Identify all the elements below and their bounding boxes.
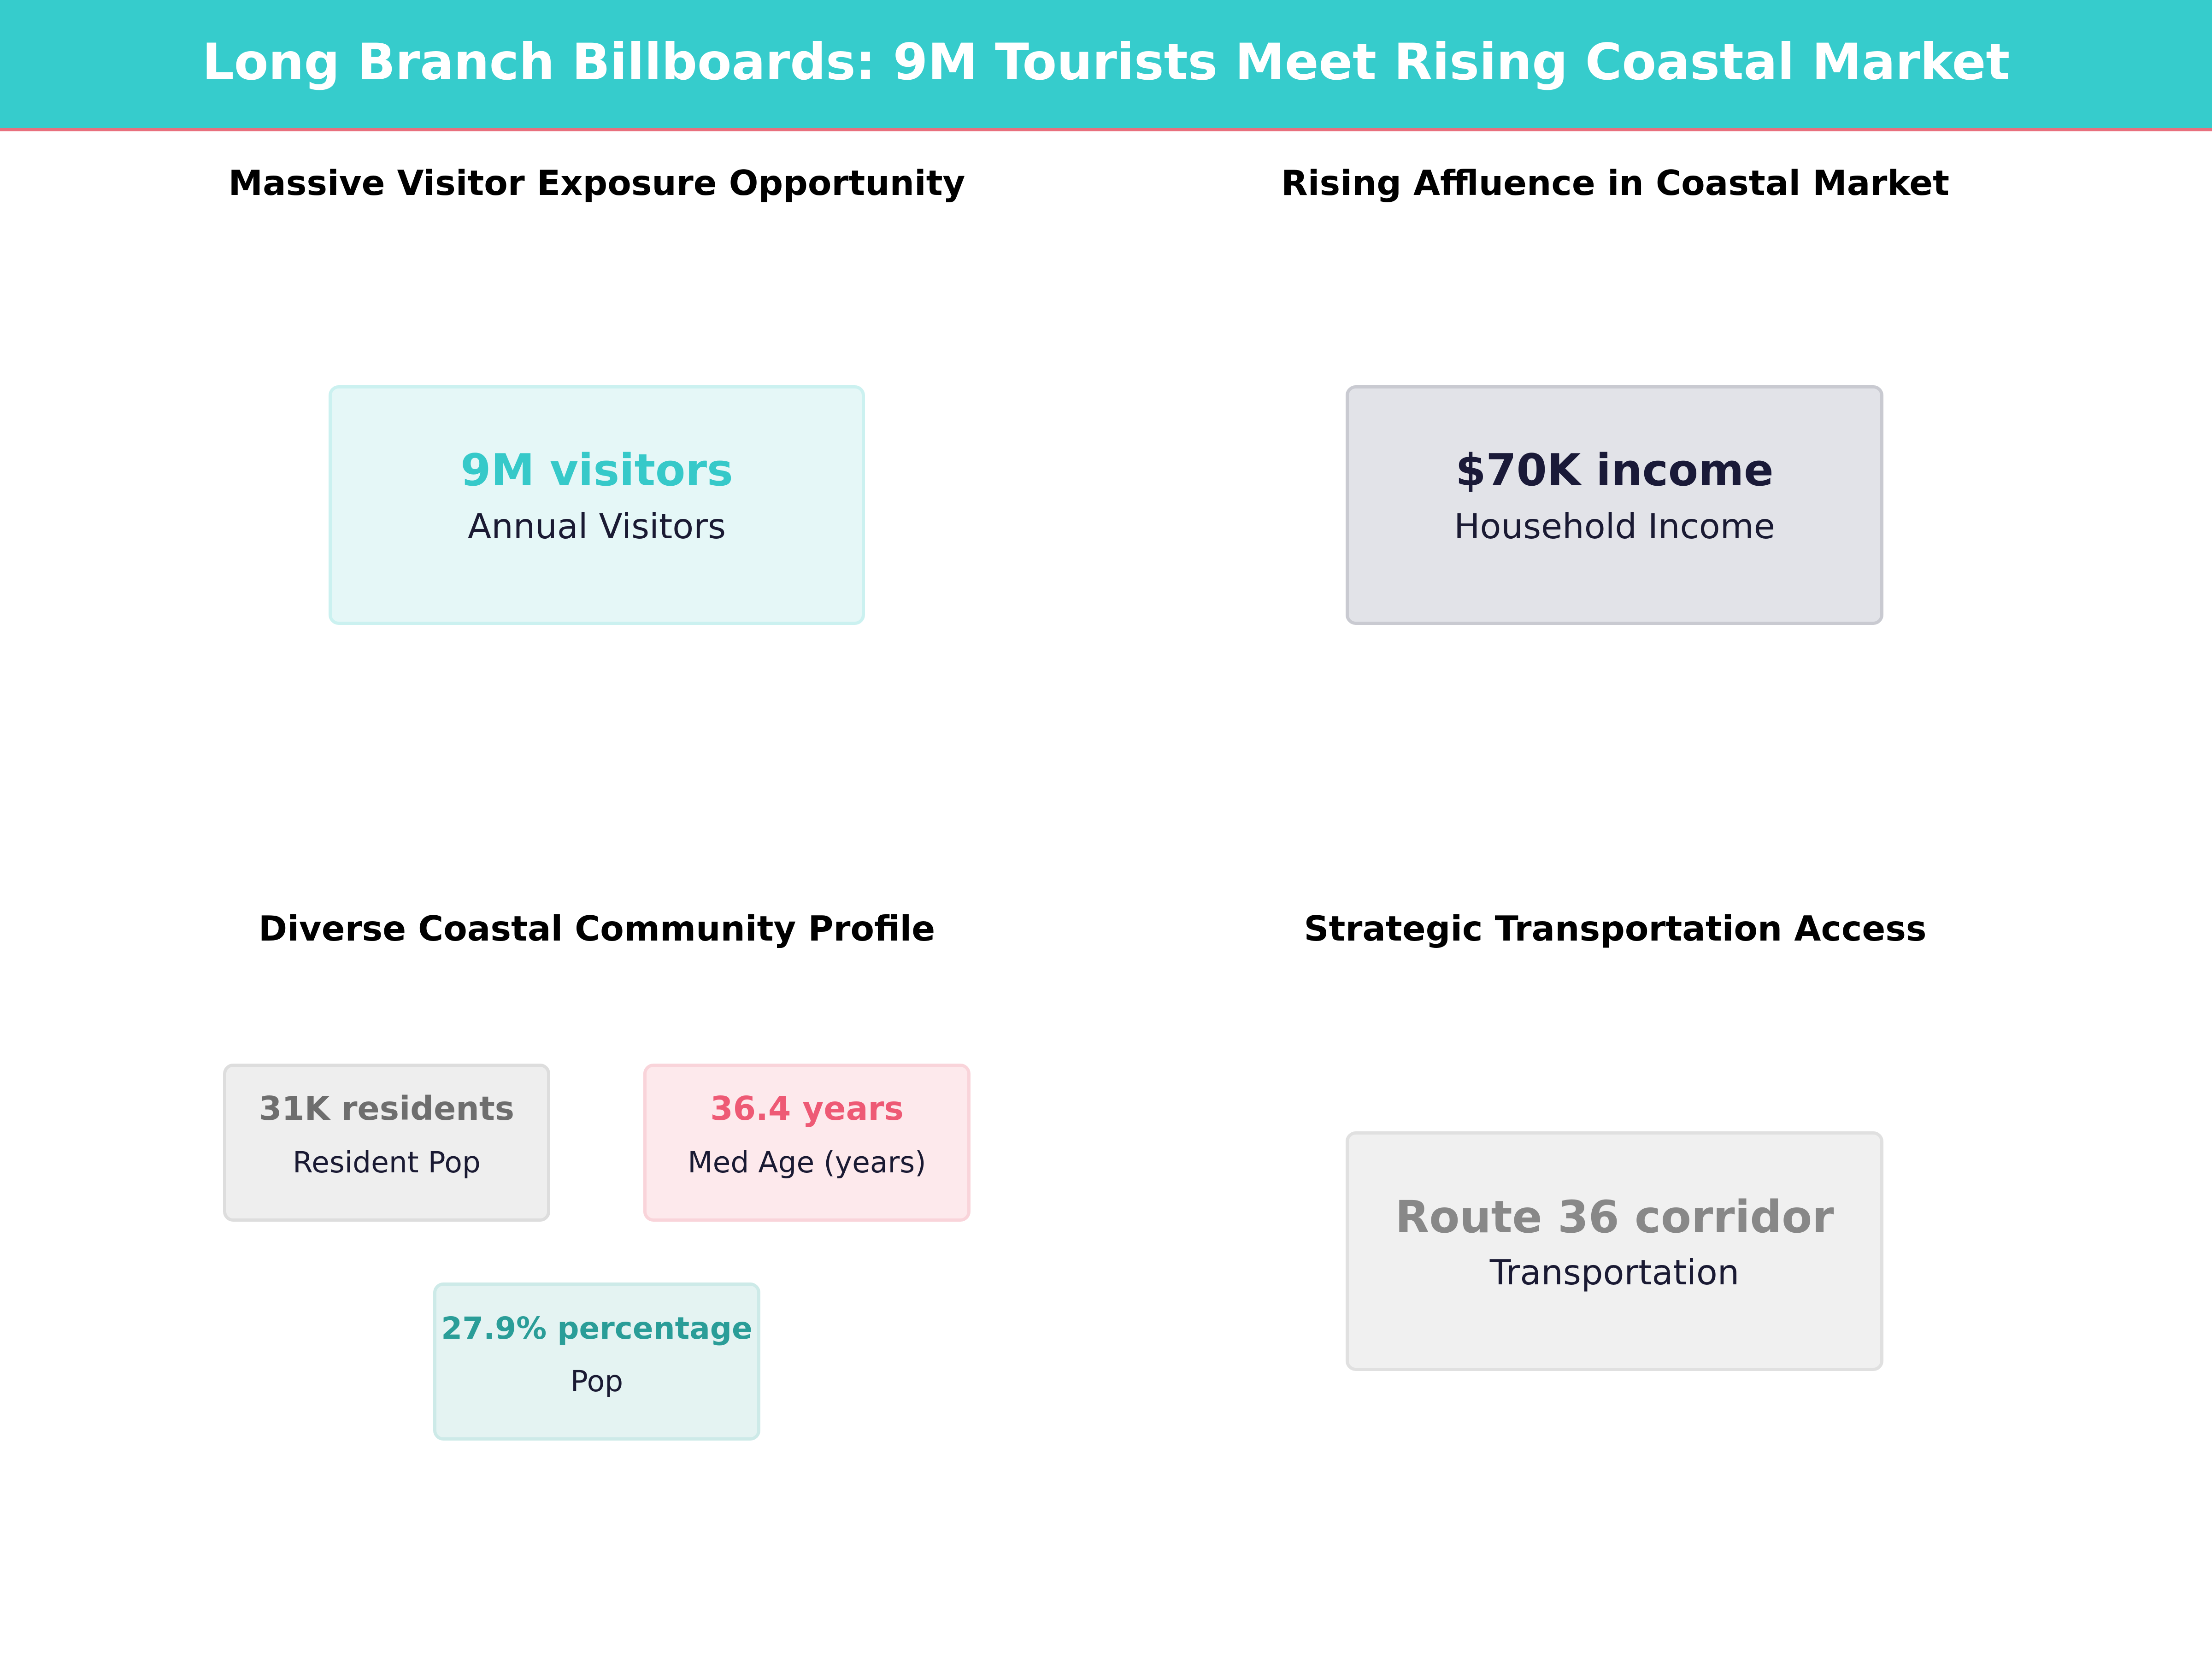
- stat card: median age: 36.4 years: [710, 1089, 904, 1128]
- stat card: route 36: Route 36 corridor: [1395, 1191, 1834, 1243]
- stat card: resident pop: 31K residents: [259, 1089, 514, 1128]
- stat card: percentage: 27.9% percentage: [441, 1311, 753, 1346]
- panel: visitor exposure: [0, 157, 1106, 664]
- panel: affluence: [1106, 157, 2212, 664]
- panel heading: affluence: Rising Affluence in Coastal Market: [1281, 163, 1949, 203]
- panel: community profile: [0, 903, 1106, 1502]
- stat card: resident pop: [223, 1064, 550, 1222]
- stat card: annual visitors: [329, 385, 865, 625]
- stat card: route 36: [1346, 1131, 1883, 1371]
- stat card: household income: Household Income: [1454, 506, 1775, 547]
- stat card: median age: [643, 1064, 971, 1222]
- title: Long Branch Billboards: 9M Tourists Meet Rising Coastal Market: [202, 33, 2010, 91]
- stat card: route 36: Transportation: [1490, 1252, 1739, 1293]
- stat card: annual visitors: Annual Visitors: [468, 506, 726, 547]
- stat card: percentage: Pop: [571, 1365, 623, 1398]
- stat card: household income: $70K income: [1455, 445, 1774, 496]
- panel heading: transportation: Strategic Transportation Access: [1304, 908, 1927, 949]
- panel: transportation: [1106, 903, 2212, 1502]
- stat card: median age: Med Age (years): [688, 1146, 926, 1179]
- panel heading: community profile: Diverse Coastal Community Profile: [259, 908, 935, 949]
- stat card: percentage: [433, 1282, 760, 1441]
- panel heading: visitor exposure: Massive Visitor Exposure Opportunity: [229, 163, 965, 203]
- stat card: annual visitors: 9M visitors: [460, 445, 733, 496]
- header banner: [0, 0, 2212, 131]
- stat card: household income: [1346, 385, 1883, 625]
- stat card: resident pop: Resident Pop: [293, 1146, 481, 1179]
